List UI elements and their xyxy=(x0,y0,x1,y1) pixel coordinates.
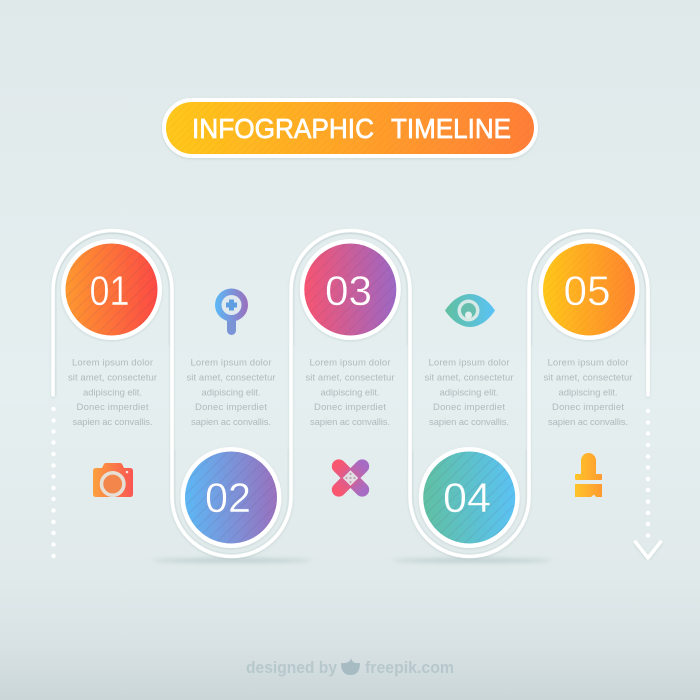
footer credit xyxy=(246,658,454,677)
icon: paint brush xyxy=(575,453,602,497)
title text: TIMELINE xyxy=(391,113,511,144)
icon: eye xyxy=(445,294,495,327)
text block 04: Lorem ipsum dolor xyxy=(428,358,510,368)
text block 01: Lorem ipsum dolor xyxy=(72,358,153,368)
text block 01: adipiscing elit. xyxy=(83,388,142,398)
step 01 badge: 01 xyxy=(90,267,130,314)
icon: crossed bandage xyxy=(329,456,372,500)
text block 01: sapien ac convallis. xyxy=(72,417,152,428)
text block 04: sit amet, consectetur xyxy=(424,372,514,384)
text block 03: adipiscing elit. xyxy=(320,388,380,398)
icon: camera xyxy=(93,463,133,497)
text block 03: Lorem ipsum dolor xyxy=(310,358,390,368)
step 04 badge: 04 xyxy=(443,474,491,521)
footer credit: freepik.com xyxy=(365,659,454,677)
ground shadows xyxy=(152,558,552,562)
text block 02 xyxy=(186,358,276,428)
text block 04 xyxy=(424,358,514,428)
step 05 badge xyxy=(541,241,637,338)
icon: freepik logo xyxy=(341,658,360,675)
step 05 badge: 05 xyxy=(564,267,610,314)
step 01 badge xyxy=(63,241,160,338)
text block 05: Lorem ipsum dolor xyxy=(548,358,628,368)
text block 02: Donec imperdiet xyxy=(195,402,267,413)
left dotted line xyxy=(51,407,56,558)
text block 02: sapien ac convallis. xyxy=(191,417,271,428)
text block 03: sapien ac convallis. xyxy=(310,417,390,428)
text block 03: sit amet, consectetur xyxy=(306,372,394,384)
text block 05: Donec imperdiet xyxy=(552,402,624,413)
text block 05 xyxy=(544,358,632,428)
text block 02: sit amet, consectetur xyxy=(186,372,276,384)
text block 05: adipiscing elit. xyxy=(558,388,618,398)
title banner xyxy=(164,100,536,156)
step 03 badge xyxy=(302,241,399,338)
winding timeline line xyxy=(53,231,648,556)
text block 01 xyxy=(68,358,157,428)
text block 04: Donec imperdiet xyxy=(433,402,505,413)
right dotted line xyxy=(646,409,650,538)
text block 01: Donec imperdiet xyxy=(76,402,149,413)
title text: INFOGRAPHIC xyxy=(192,113,374,144)
title text xyxy=(192,113,511,144)
step 03 badge: 03 xyxy=(325,267,372,314)
text block 02: Lorem ipsum dolor xyxy=(190,358,272,368)
icon: magnifier with plus xyxy=(215,288,248,335)
text block 03: Donec imperdiet xyxy=(314,402,386,413)
text block 03 xyxy=(306,358,394,428)
text block 01: sit amet, consectetur xyxy=(68,372,157,384)
text block 04: adipiscing elit. xyxy=(440,388,498,398)
step 02 badge: 02 xyxy=(205,474,251,521)
text block 02: adipiscing elit. xyxy=(202,388,260,398)
step 04 badge xyxy=(421,449,517,546)
text block 05: sapien ac convallis. xyxy=(548,417,628,428)
step 02 badge xyxy=(183,449,279,546)
footer credit: designed by xyxy=(246,659,338,677)
arrow: timeline end chevron xyxy=(636,542,660,558)
text block 05: sit amet, consectetur xyxy=(544,372,632,384)
text block 04: sapien ac convallis. xyxy=(429,417,509,428)
